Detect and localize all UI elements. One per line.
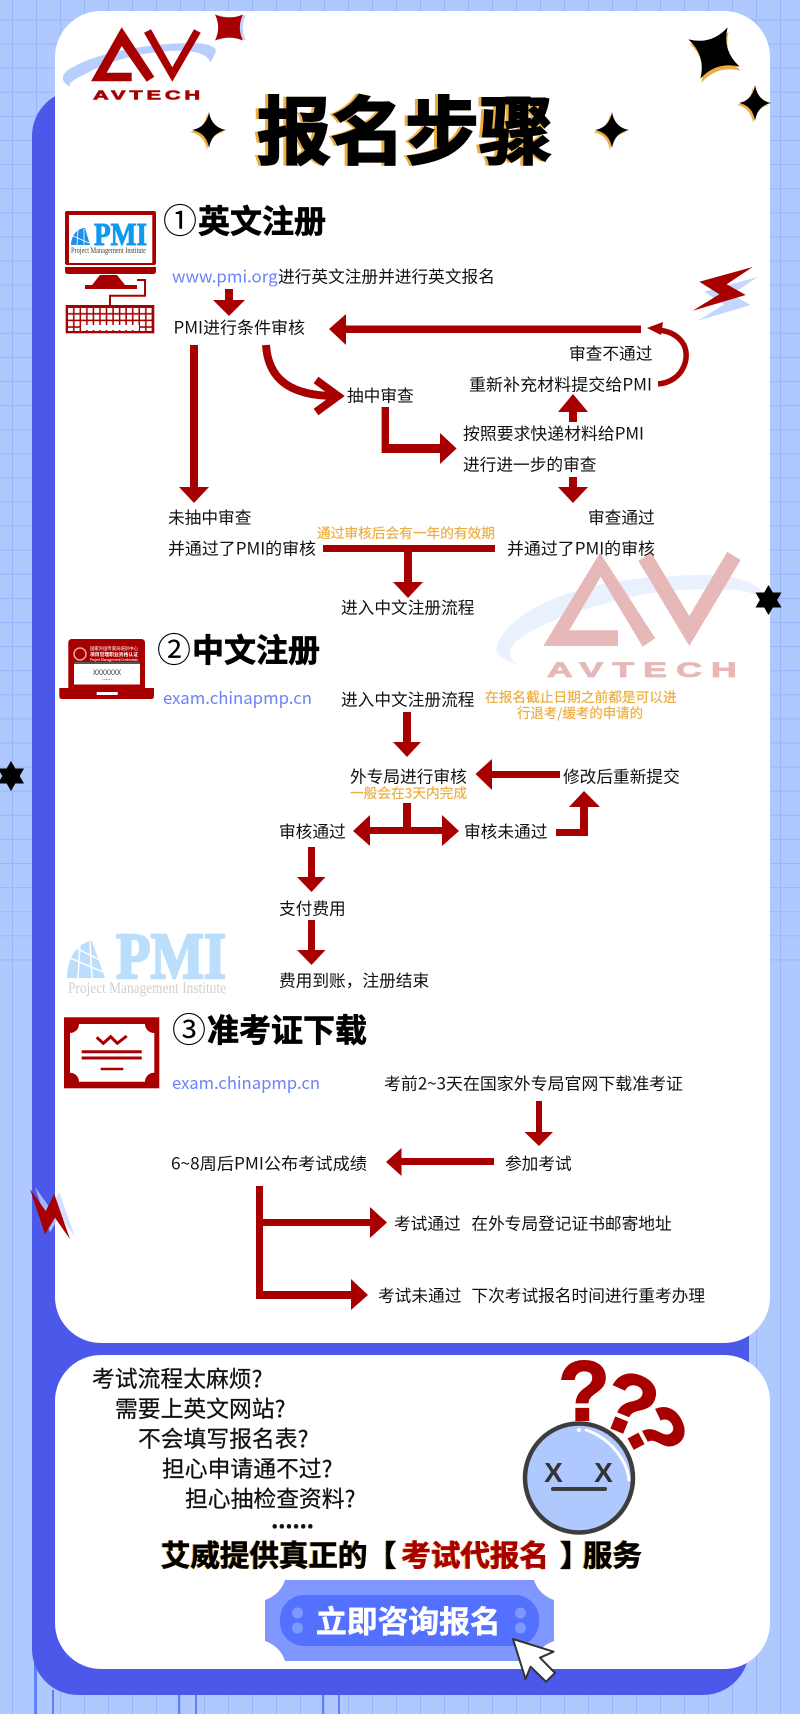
- icon: lightning bolt: [693, 267, 758, 321]
- text: chinapmp site: exam.chinapmp.cn: [163, 685, 312, 709]
- icon: dizzy face: X: [544, 1457, 563, 1488]
- arrow: T connector to Chinese registration: [323, 545, 495, 598]
- watermark: AVTECH logo: [496, 552, 765, 682]
- note: refund or deferral: [485, 686, 677, 722]
- button: consult and register: [265, 1580, 554, 1661]
- icon: computer with PMI logo: [65, 211, 156, 333]
- text: exam failed: 下次考试报名时间进行重考办理: [471, 1282, 705, 1306]
- text: review not passed: 审核未通过: [464, 818, 548, 842]
- text: real exam registration service: 】: [560, 1533, 590, 1575]
- text: foreign bureau review: 外专局进行审核: [350, 764, 467, 788]
- icon: laptop with certificate page: 项目管理职业资格认证: [90, 651, 138, 658]
- text: worries list: ......: [271, 1502, 314, 1535]
- text: review passed: 审核通过: [279, 818, 346, 842]
- text: review failed: 审查不通过: [569, 340, 653, 364]
- icon: laptop with certificate page: 国家外国专家局培训中心: [90, 645, 138, 652]
- icon: computer with PMI logo: PMI: [94, 216, 147, 252]
- note: refund or deferral: 行退考/缓考的申请的: [517, 702, 643, 722]
- icon: large black sparkle: [675, 14, 754, 96]
- watermark: AVTECH logo: AVTECH: [547, 658, 746, 682]
- text: resubmit materials: 重新补充材料提交给PMI: [469, 372, 652, 396]
- text: worries list: 需要上英文网站?: [115, 1391, 285, 1424]
- text: not audited passed: [168, 504, 316, 560]
- text: worries list: 担心申请通不过?: [162, 1451, 332, 1484]
- icon: computer with PMI logo: Project Management Institute: [71, 246, 146, 255]
- logo: AVTECH: [63, 27, 216, 102]
- text: payment received: 费用到账，注册结束: [279, 968, 429, 992]
- arrow: down to complete: [297, 920, 326, 965]
- arrow: back to PMI review: [329, 314, 641, 345]
- text: mail materials to PMI: 进行进一步的审查: [463, 452, 597, 476]
- icon: laptop with certificate page: XXXXXXX: [93, 668, 121, 678]
- text: audit passed: 审查通过: [588, 504, 655, 528]
- heading: step 1: ①: [163, 194, 197, 243]
- panel: registration steps: [55, 11, 770, 1343]
- text: mail materials to PMI: [463, 420, 644, 476]
- text: pmi website registration: www.pmi.org: [172, 264, 278, 288]
- text: audit passed: 并通过了PMI的审核: [507, 536, 655, 560]
- arrow: audit to mail materials: [382, 407, 457, 464]
- arrow: curved resubmission: [647, 322, 686, 384]
- text: real exam registration service: 服务: [583, 1533, 642, 1575]
- icon: laptop with certificate page: ......: [102, 673, 112, 682]
- button: consult and register: 立即咨询报名: [316, 1596, 501, 1642]
- text: worries list: 考试流程太麻烦?: [92, 1361, 262, 1394]
- text: download admission ticket: 考前2~3天在国家外专局官网下载准考证: [384, 1070, 683, 1094]
- arrow: to PMI review: [213, 289, 245, 316]
- logo: AVTECH: AVTECH: [93, 88, 204, 102]
- arrow: result branches: [256, 1186, 387, 1310]
- icon: lightning bolt lower left: [30, 1187, 75, 1239]
- text: worries list: 担心抽检查资料?: [185, 1481, 355, 1514]
- heading: step 1: 英文注册: [198, 196, 326, 242]
- title: 报名步骤: [257, 73, 553, 180]
- text: take exam: 参加考试: [505, 1150, 572, 1174]
- arrow: bent up to resubmit: [556, 791, 600, 836]
- icon: question marks: ?: [606, 1391, 706, 1474]
- text: selected for audit: 抽中审查: [347, 382, 414, 406]
- text: modify and resubmit: 修改后重新提交: [563, 764, 680, 788]
- icon: laptop with certificate page: Project Management Credentials: [90, 658, 138, 663]
- text: exam passed: 在外专局登记证书邮寄地址: [471, 1210, 672, 1234]
- arrow: left to results: [386, 1148, 494, 1176]
- icon: red sparkle: [215, 14, 246, 40]
- text: worries list: 不会填写报名表?: [138, 1421, 308, 1454]
- icon: black star right: [756, 585, 782, 615]
- arrow: to foreign bureau review: [393, 712, 421, 757]
- text: audit passed: [507, 504, 655, 560]
- icon: dizzy face: X: [594, 1457, 613, 1488]
- text: mail materials to PMI: 按照要求快递材料给PMI: [463, 420, 644, 444]
- watermark: PMI logo: [67, 920, 226, 997]
- heading: step 3: ③: [172, 1003, 206, 1052]
- icon: sparkle left of title: [190, 112, 226, 150]
- watermark: PMI logo: PMI: [116, 920, 226, 993]
- text: pay fee: 支付费用: [279, 896, 346, 920]
- text: results: 6~8周后PMI公布考试成绩: [171, 1150, 367, 1174]
- arrow: double split: [353, 803, 459, 846]
- icon: question marks: [558, 1344, 706, 1474]
- text: real exam registration service: 考试代报名: [402, 1533, 549, 1575]
- text: PMI review: PMI进行条件审核: [174, 314, 305, 338]
- icon: dizzy face: [525, 1424, 633, 1532]
- icon: black star left: [0, 761, 24, 791]
- text: not audited passed: 并通过了PMI的审核: [168, 536, 316, 560]
- icon: cursor: [513, 1639, 555, 1682]
- text: not audited passed: 未抽中审查: [168, 504, 252, 528]
- heading: step 3: 准考证下载: [207, 1006, 367, 1052]
- heading: step 2: ②: [157, 623, 191, 672]
- icon: laptop with certificate page: [59, 639, 154, 699]
- icon: admission certificate: [64, 1017, 159, 1088]
- note: refund or deferral: 在报名截止日期之前都是可以进: [485, 686, 677, 706]
- watermark: PMI logo: Project Management Institute: [68, 980, 226, 997]
- arrow: resubmit to review: [476, 759, 560, 790]
- note: three days: 一般会在3天内完成: [350, 782, 467, 802]
- icon: sparkle right of title: [593, 112, 629, 150]
- text: real exam registration service: [161, 1533, 642, 1575]
- text: pmi website registration: [172, 264, 495, 288]
- text: real exam registration service: 艾威提供真正的: [161, 1533, 368, 1575]
- icon: small black sparkle right: [737, 85, 771, 123]
- arrow: curved to selected for audit: [266, 345, 338, 412]
- text: chinapmp site step 3: exam.chinapmp.cn: [172, 1070, 320, 1094]
- text: exam failed: 考试未通过: [378, 1282, 462, 1306]
- icon: question marks: ?: [588, 1351, 671, 1457]
- panel: exam service promotion: [55, 1355, 770, 1669]
- text: enter Chinese registration: 进入中文注册流程: [341, 594, 475, 618]
- note: one year validity: 通过审核后会有一年的有效期: [317, 522, 495, 542]
- arrow: up to resubmit: [558, 394, 588, 422]
- heading: step 2: 中文注册: [192, 626, 320, 672]
- arrow: long down not audited: [179, 345, 209, 503]
- arrow: down to review passed: [558, 477, 588, 503]
- icon: question marks: ?: [558, 1344, 610, 1438]
- text: pmi website registration: 进行英文注册并进行英文报名: [278, 264, 495, 288]
- text: worries list: [92, 1361, 355, 1535]
- text: real exam registration service: 【: [367, 1533, 397, 1575]
- text: exam passed: 考试通过: [394, 1210, 461, 1234]
- arrow: down to payment: [297, 847, 326, 892]
- text: enter Chinese registration step: 进入中文注册流程: [341, 686, 475, 710]
- arrow: down to take exam: [524, 1101, 553, 1146]
